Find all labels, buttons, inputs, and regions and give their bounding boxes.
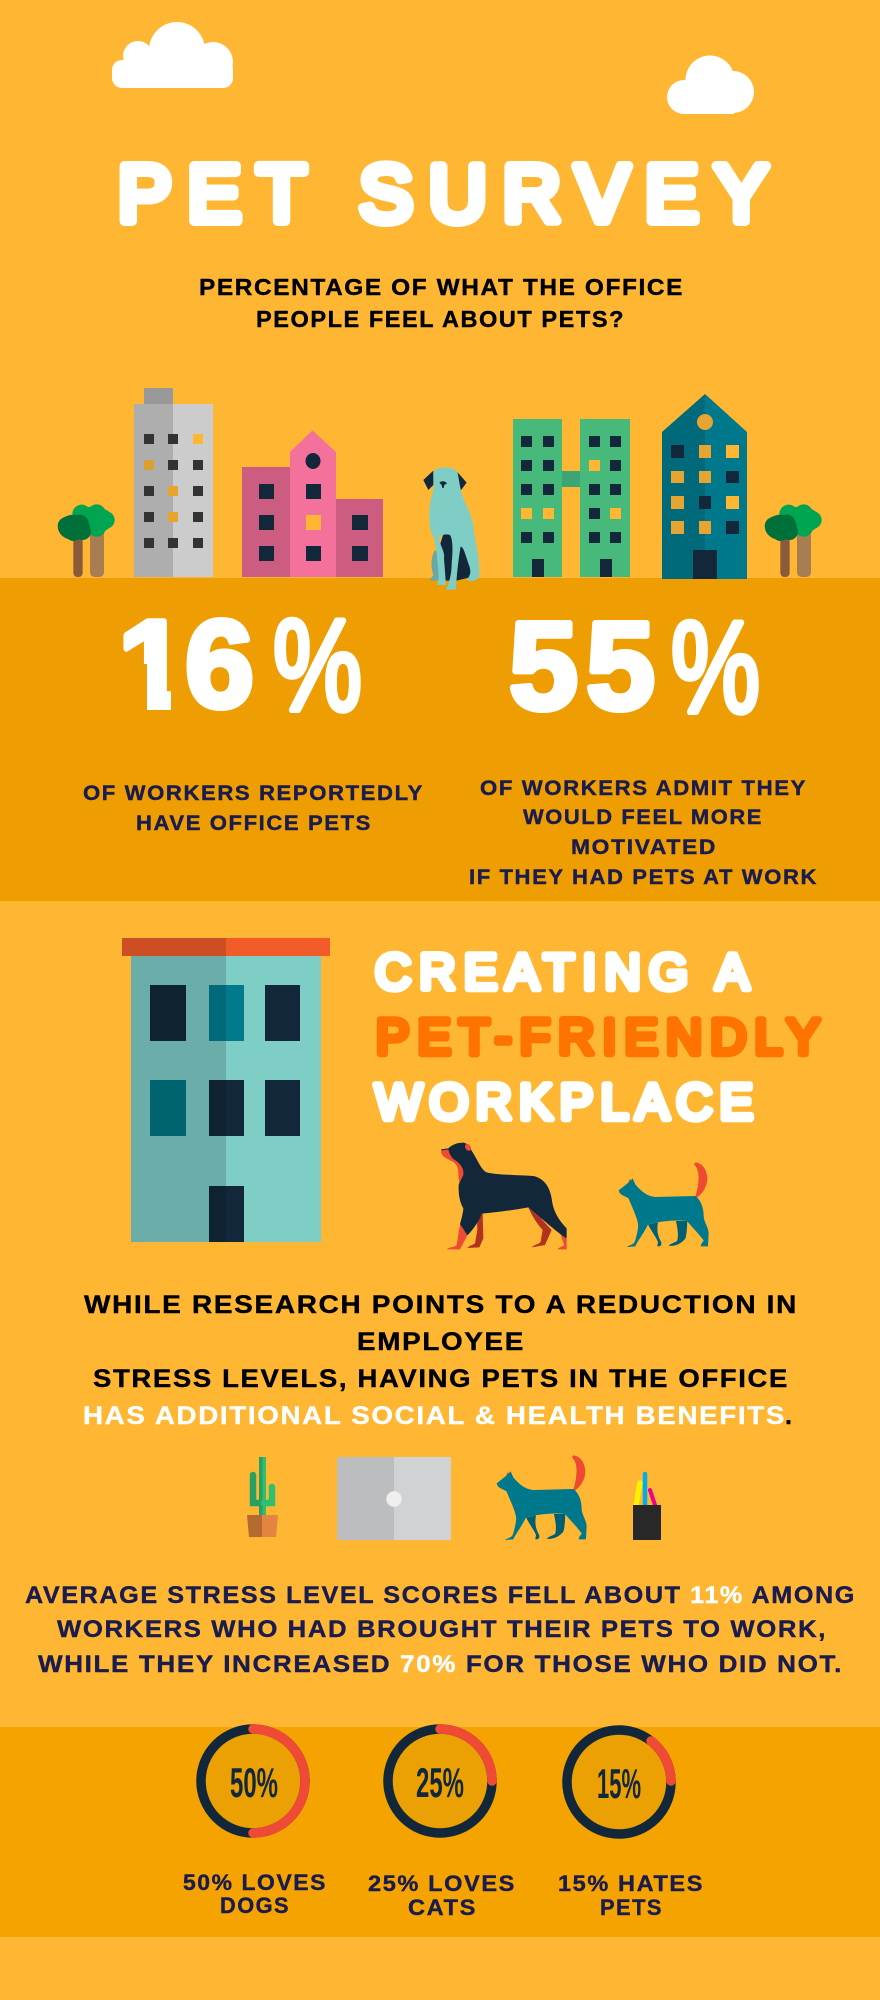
label: loves cats: 25% LOVES (368, 1871, 516, 1896)
label: loves cats: CATS (408, 1895, 477, 1920)
text: stress level paragraph: AVERAGE STRESS LEVEL SCORES FELL ABOUT 11% AMONG (25, 1582, 856, 1609)
icon: sitting dog (423, 467, 479, 590)
text: motivation: OF WORKERS ADMIT THEY (480, 777, 807, 800)
label: hates pets: 15% HATES (558, 1871, 704, 1896)
statistic: 16%: % (273, 592, 362, 738)
icon: large office building (122, 938, 330, 1242)
label: loves dogs (183, 1870, 327, 1918)
icon: cloud left (112, 22, 233, 88)
chart: 50% donut: 50% (230, 1759, 278, 1806)
statistic: 55% (509, 594, 760, 740)
label: hates pets: PETS (600, 1895, 663, 1920)
label: loves cats (368, 1871, 516, 1920)
text: research paragraph (83, 1291, 798, 1430)
title: PET SURVEY (118, 149, 768, 238)
heading: creating a pet-friendly workplace: CREATING A (375, 944, 750, 1000)
label: loves dogs: DOGS (220, 1893, 290, 1918)
icon: pink building (242, 430, 383, 577)
statistic: 16% (123, 616, 361, 714)
band: ground and statistics (0, 578, 880, 901)
statistic: 55%: % (671, 594, 760, 740)
subtitle: PEOPLE FEEL ABOUT PETS? (256, 306, 625, 332)
icon: cactus (247, 1457, 278, 1537)
icon: teal building (662, 394, 747, 579)
icon: trees right (765, 504, 822, 577)
text: research paragraph: STRESS LEVELS, HAVING PETS IN THE OFFICE (93, 1365, 789, 1393)
statistic: 55%: 5 (586, 598, 655, 736)
text: office pets: OF WORKERS REPORTEDLY (83, 782, 424, 805)
text: motivation: IF THEY HAD PETS AT WORK (469, 866, 818, 889)
icon: grey tower (134, 388, 213, 577)
icon: cloud right (667, 56, 754, 114)
text: stress level paragraph: WORKERS WHO HAD BROUGHT THEIR PETS TO WORK, (57, 1616, 827, 1643)
text: motivation: WOULD FEEL MORE (523, 806, 763, 829)
heading: creating a pet-friendly workplace (375, 944, 820, 1130)
text: stress level paragraph (25, 1582, 856, 1678)
text: research paragraph: . (785, 1402, 793, 1430)
chart: 25% donut: 25% (416, 1759, 464, 1806)
text: motivation (469, 777, 818, 889)
label: hates pets (558, 1871, 704, 1920)
icon: green twin towers (513, 419, 630, 577)
chart: 15% donut (567, 1730, 671, 1834)
chart: 50% donut (201, 1729, 305, 1833)
text: research paragraph: EMPLOYEE (357, 1328, 525, 1356)
text: stress level paragraph: WHILE THEY INCREASED 70% FOR THOSE WHO DID NOT. (38, 1651, 843, 1678)
label: loves dogs: 50% LOVES (183, 1870, 327, 1895)
icon: pen cup (633, 1474, 661, 1540)
chart: 15% donut: 15% (597, 1760, 641, 1807)
text: office pets: HAVE OFFICE PETS (136, 812, 372, 835)
band: donut charts (0, 1727, 880, 1937)
icon: standing dog (441, 1143, 567, 1249)
heading: creating a pet-friendly workplace: PET-FRIENDLY (376, 1009, 820, 1065)
subtitle (199, 274, 684, 332)
icon: grey box (337, 1457, 451, 1540)
text: office pets (83, 782, 424, 835)
text: research paragraph: WHILE RESEARCH POINTS TO A REDUCTION IN (84, 1291, 798, 1319)
icon: trees left (58, 504, 115, 577)
icon: walking cat upper (619, 1162, 709, 1247)
statistic: 16%: 1 (118, 596, 187, 734)
text: motivation: MOTIVATED (571, 836, 717, 859)
heading: creating a pet-friendly workplace: WORKPLACE (375, 1074, 753, 1130)
chart: 25% donut (388, 1729, 492, 1833)
statistic: 55%: 5 (509, 598, 578, 736)
subtitle: PERCENTAGE OF WHAT THE OFFICE (199, 274, 684, 300)
icon: walking cat lower (497, 1455, 587, 1540)
statistic: 16%: 6 (185, 596, 254, 734)
text: research paragraph: HAS ADDITIONAL SOCIAL & HEALTH BENEFITS (83, 1402, 786, 1430)
